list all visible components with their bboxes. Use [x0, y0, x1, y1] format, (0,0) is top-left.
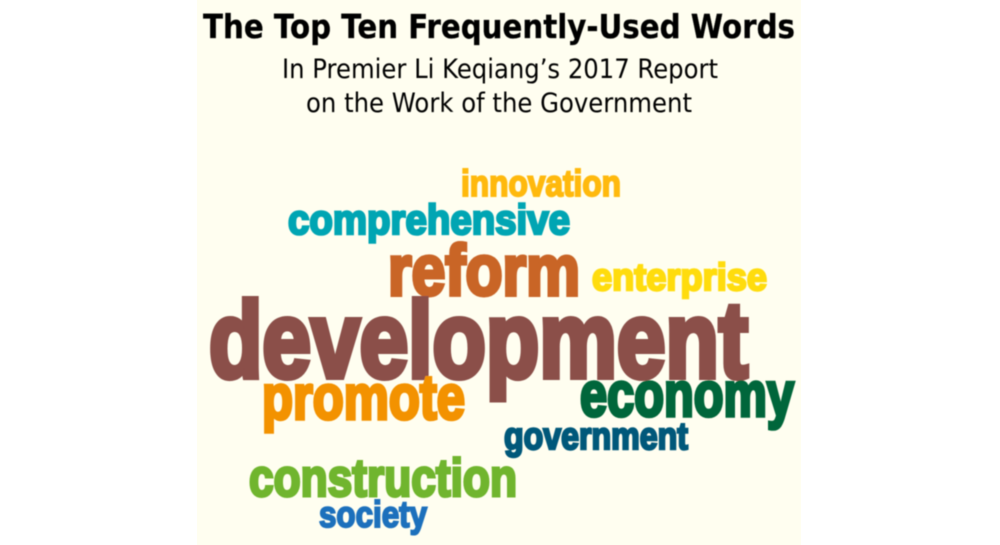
subtitle: on the Work of the Government [306, 88, 692, 119]
word: society: society [319, 494, 427, 535]
word: promote: promote [262, 363, 465, 433]
word: government: government [504, 416, 688, 458]
panel: cream background [197, 0, 801, 545]
subtitle: In Premier Li Keqiang’s 2017 Report [282, 54, 718, 85]
word: construction: construction [249, 449, 517, 508]
word: development: development [209, 279, 748, 400]
word: enterprise: enterprise [592, 257, 767, 299]
word: economy: economy [580, 360, 794, 430]
word: innovation: innovation [461, 163, 621, 204]
word: comprehensive: comprehensive [288, 196, 570, 243]
word cloud [209, 163, 794, 535]
subtitle [282, 54, 718, 119]
title: The Top Ten Frequently-Used Words [203, 7, 795, 46]
word: reform: reform [388, 232, 580, 311]
